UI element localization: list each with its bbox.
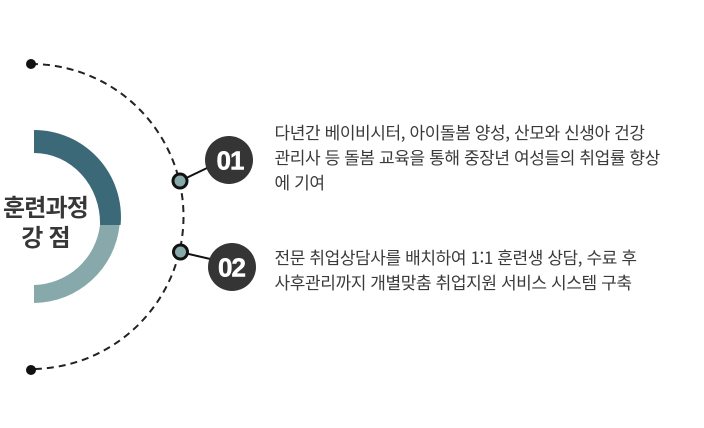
text block 01: 다년간 베이비시터, 아이돌봄 양성, 산모와 신생아 건강 — [274, 119, 645, 144]
text block 01: 관리사 등 돌봄 교육을 통해 중장년 여성들의 취업률 향상 — [274, 144, 660, 169]
badge 01 — [205, 136, 253, 184]
arc end dot top — [26, 59, 36, 69]
connector 02 — [180, 252, 232, 264]
node 02 — [174, 245, 188, 259]
text block 02: 전문 취업상담사를 배치하여 1:1 훈련생 상담, 수료 후 — [274, 244, 637, 269]
badge 02 — [208, 243, 256, 291]
dashed arc — [31, 64, 184, 369]
text block 01: 에 기여 — [274, 169, 325, 194]
center heading — [3, 188, 88, 253]
center heading: 강 점 — [21, 218, 70, 253]
arc end dot bottom — [26, 365, 36, 375]
ring lower segment — [34, 225, 120, 303]
connector 01 — [180, 157, 230, 181]
node 01 — [173, 174, 187, 188]
text block 01 — [274, 119, 660, 194]
badge 01: 01 — [217, 146, 244, 176]
center heading: 훈련과정 — [3, 188, 88, 223]
badge 02: 02 — [218, 252, 245, 282]
text block 02 — [274, 244, 637, 294]
ring upper segment — [34, 130, 121, 225]
text block 02: 사후관리까지 개별맞춤 취업지원 서비스 시스템 구축 — [274, 269, 632, 294]
